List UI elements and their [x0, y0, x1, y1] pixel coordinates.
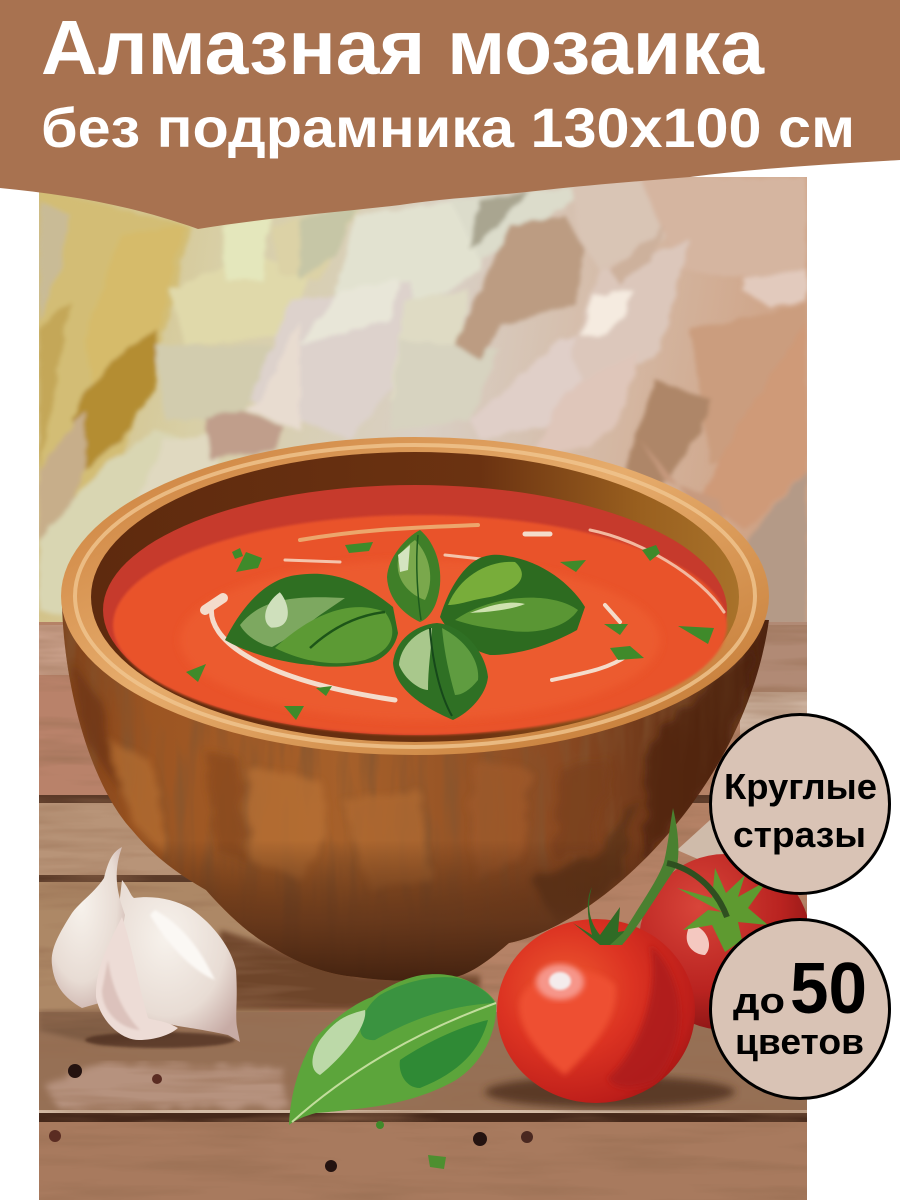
calyx	[677, 868, 768, 952]
herb flecks	[186, 542, 714, 720]
bowl body	[50, 600, 780, 1000]
tomato: front	[497, 887, 695, 1103]
tomato: back	[639, 854, 811, 1030]
garlic shadow	[85, 1032, 235, 1048]
clove highlight	[150, 910, 215, 980]
bowl rim	[61, 437, 769, 755]
badge: up to 50 colours: 50	[790, 949, 867, 1029]
badge: round rhinestones: Круглые	[724, 766, 877, 807]
subtitle: без подрамника 130х100 см	[41, 96, 855, 159]
badge: up to 50 colours: цветов	[735, 1021, 864, 1062]
soup rear band	[103, 485, 727, 735]
wooden bowl	[50, 437, 780, 1000]
badge: round rhinestones	[710, 714, 890, 894]
badge: round rhinestones: стразы	[733, 814, 866, 855]
basil leaf: left	[225, 574, 398, 667]
stem branch	[667, 863, 727, 917]
back tomato highlight	[687, 925, 709, 955]
basil leaf: top	[387, 530, 440, 622]
cream swirl	[205, 525, 724, 700]
title: Алмазная мозаика	[41, 5, 765, 91]
basil leaves on soup	[225, 530, 585, 720]
wooden table planks	[39, 622, 807, 1200]
dark side	[608, 945, 680, 1088]
soup surface	[113, 515, 727, 735]
header banner	[0, 0, 900, 229]
herb fleck on table	[428, 1155, 446, 1169]
soup lighter centre	[188, 590, 652, 666]
white spot	[549, 972, 571, 990]
garlic bulb	[52, 847, 240, 1048]
highlight glow	[536, 964, 584, 1000]
peppercorns	[49, 1064, 533, 1172]
orange patch	[519, 971, 616, 1075]
basil leaf on table	[289, 974, 496, 1125]
basil leaf: bottom	[393, 623, 488, 720]
garlic clove: centre	[96, 917, 178, 1040]
painted wall background	[39, 177, 807, 637]
centre clove tint	[102, 960, 140, 1030]
garlic clove: left	[52, 847, 125, 1008]
badge: up to 50 colours	[710, 920, 890, 1098]
basil leaf: right	[440, 555, 585, 655]
garlic clove: right	[118, 880, 240, 1042]
rim highlight	[75, 445, 755, 747]
tomato stem	[610, 808, 678, 945]
painting: tomato soup still life	[39, 177, 811, 1200]
wedge of light plank behind tomato	[678, 820, 724, 859]
tomato shadow	[485, 1076, 735, 1108]
bowl inner wall	[91, 452, 739, 742]
sepals	[573, 888, 624, 945]
badge: up to 50 colours: до	[733, 980, 785, 1021]
